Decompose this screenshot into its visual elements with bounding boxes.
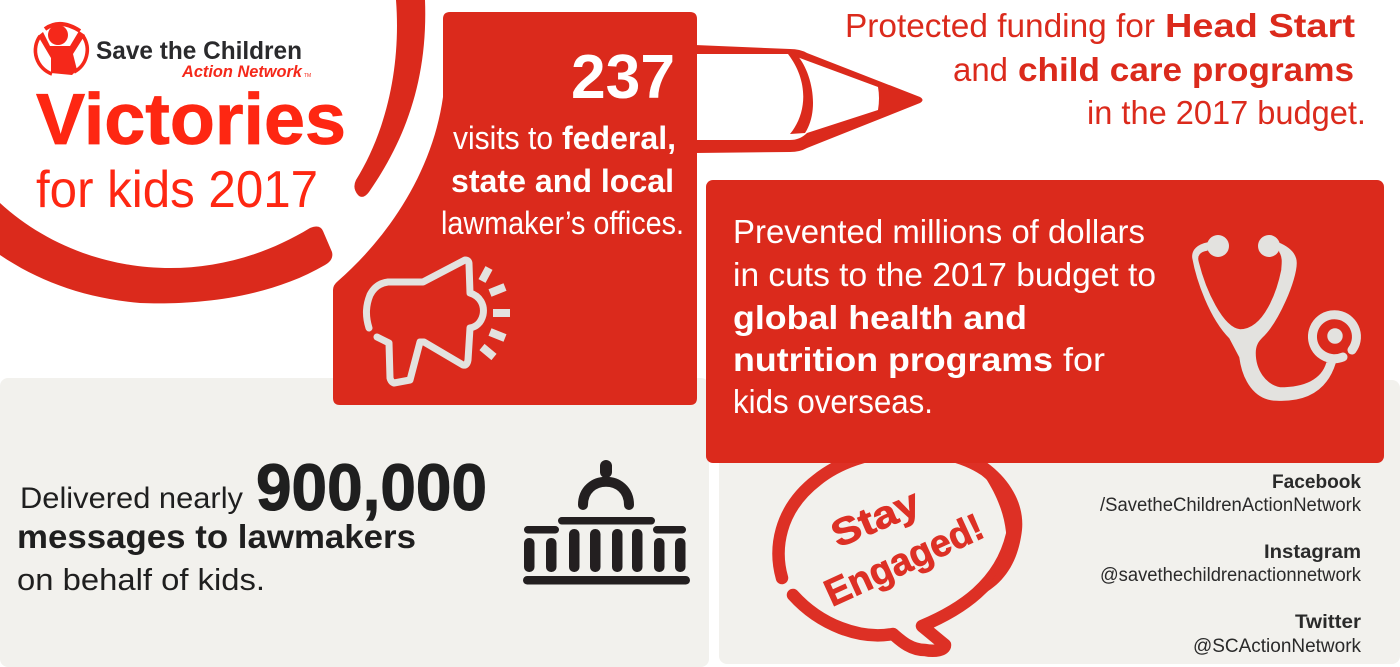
icon: child with raised arms bbox=[35, 24, 87, 75]
text: social links bbox=[1100, 472, 1362, 657]
icon: megaphone bbox=[366, 260, 510, 383]
logo: Save the Children Action Network bbox=[35, 24, 311, 81]
logo: Save the Children Action Network: TM bbox=[304, 73, 311, 79]
text: 237 visits bbox=[441, 43, 684, 241]
text: messages delivered: messages to lawmakers bbox=[17, 518, 416, 555]
panel: 237 visits bbox=[333, 12, 697, 405]
text: global health bbox=[733, 213, 1156, 420]
text: social links: Twitter bbox=[1295, 612, 1362, 633]
title: Victories bbox=[36, 80, 346, 160]
logo: Save the Children Action Network: Save the Children bbox=[96, 37, 302, 65]
speech bubble: stay engaged bbox=[779, 450, 1022, 651]
speech bubble: stay engaged: Stay bbox=[825, 482, 926, 556]
icon: pencil bbox=[695, 45, 922, 153]
text: 237 visits: 237 bbox=[571, 43, 675, 112]
logo: Save the Children Action Network: Action Network bbox=[181, 62, 303, 81]
panel: messages delivered bbox=[0, 378, 709, 667]
text: 237 visits: state and local bbox=[451, 163, 674, 199]
text: messages delivered bbox=[17, 450, 487, 597]
icon: stethoscope bbox=[1193, 235, 1356, 400]
text: messages delivered: on behalf of kids. bbox=[17, 562, 265, 597]
text: global health: Prevented millions of dollars bbox=[733, 213, 1145, 250]
text: protected funding: child care programs bbox=[1018, 51, 1354, 88]
panel: stay engaged and social links bbox=[719, 380, 1400, 664]
text: messages delivered: 900,000 bbox=[256, 450, 487, 524]
text: social links: /SavetheChildrenActionNetwork bbox=[1100, 495, 1361, 516]
text: global health: in cuts to the 2017 budget to bbox=[733, 256, 1156, 293]
text: 237 visits: lawmaker’s offices. bbox=[441, 205, 684, 241]
title bbox=[36, 80, 346, 219]
text: social links: @SCActionNetwork bbox=[1193, 636, 1361, 657]
text: global health: for bbox=[1063, 341, 1105, 378]
decorative ring: top arc bbox=[354, 0, 425, 197]
decorative ring: bottom arc bbox=[0, 203, 332, 303]
text: protected funding: Head Start bbox=[1165, 7, 1355, 44]
text: protected funding bbox=[845, 7, 1366, 131]
text: global health: nutrition programs bbox=[733, 341, 1053, 378]
text: messages delivered: Delivered nearly bbox=[20, 482, 243, 515]
icon: capitol building bbox=[523, 460, 690, 584]
text: protected funding: Protected funding for bbox=[845, 7, 1155, 44]
panel: global health bbox=[706, 180, 1384, 463]
text: social links: Instagram bbox=[1264, 542, 1361, 563]
text: 237 visits: visits to bbox=[453, 120, 553, 156]
text: global health: global health and bbox=[733, 299, 1027, 336]
text: social links: @savethechildrenactionnetwork bbox=[1100, 565, 1361, 586]
text: social links: Facebook bbox=[1272, 472, 1361, 493]
text: global health: kids overseas. bbox=[733, 383, 933, 420]
text: protected funding: and bbox=[953, 51, 1008, 88]
text: 237 visits: federal, bbox=[562, 120, 676, 156]
speech bubble: stay engaged: Engaged! bbox=[818, 506, 990, 615]
text: protected funding: in the 2017 budget. bbox=[1087, 94, 1366, 131]
title: for kids 2017 bbox=[36, 161, 318, 219]
